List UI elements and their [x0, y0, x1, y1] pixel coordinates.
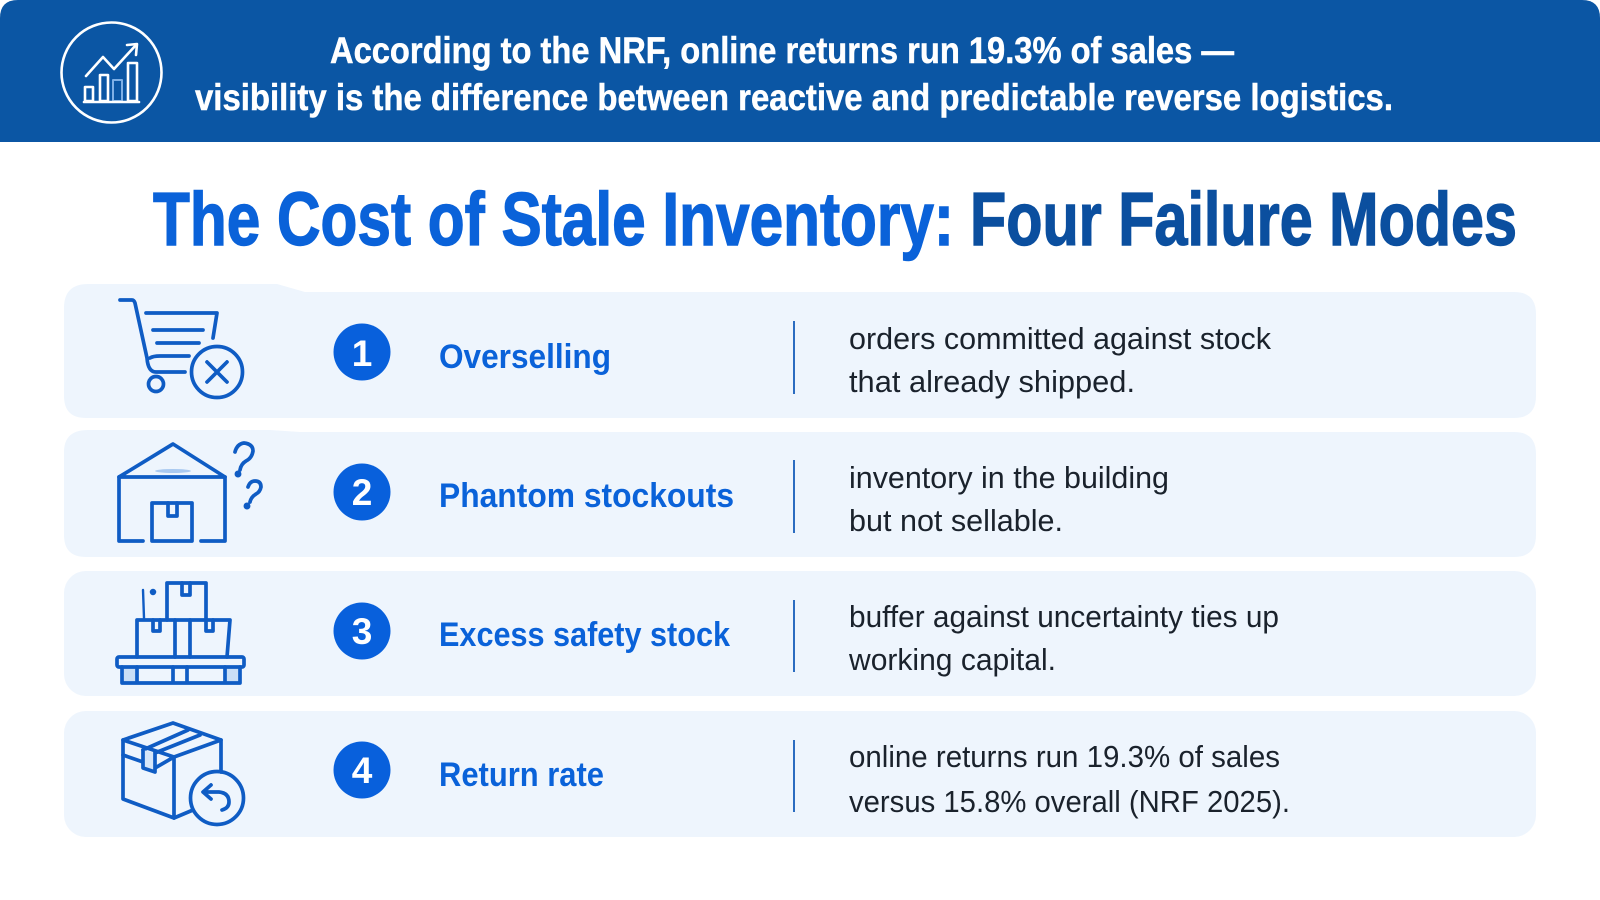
description: phantom stockouts: inventory in the building: [849, 460, 1169, 495]
banner: [0, 0, 1600, 142]
description: phantom stockouts: [849, 460, 1169, 538]
step number 4: [334, 742, 390, 798]
description: phantom stockouts: but not sellable.: [849, 503, 1063, 538]
step number 4: 4: [352, 750, 373, 791]
title: The Cost of Stale Inventory:: [153, 177, 954, 261]
icon: warehouse with question marks: [119, 443, 261, 541]
step number 1: [334, 324, 390, 380]
label: phantom stockouts: Phantom stockouts: [439, 477, 734, 515]
description: excess safety stock: [848, 599, 1279, 677]
label: overselling: Overselling: [439, 338, 611, 376]
description: return rate: online returns run 19.3% of sales: [849, 739, 1280, 774]
description: excess safety stock: working capital.: [848, 642, 1056, 677]
icon: shopping cart with x: [120, 300, 242, 398]
step number 2: [334, 464, 390, 520]
step number 3: [334, 602, 390, 660]
label: return rate: Return rate: [439, 756, 604, 794]
icon: boxes on pallet: [117, 583, 244, 683]
step number 2: 2: [352, 472, 372, 513]
description: overselling: orders committed against stock: [849, 321, 1271, 356]
panel: return rate: [64, 711, 1536, 837]
description: overselling: that already shipped.: [849, 364, 1135, 399]
banner text: [195, 30, 1393, 118]
icon: growth chart in circle: [62, 22, 162, 122]
description: overselling: [849, 321, 1271, 399]
label: excess safety stock: Excess safety stock: [439, 616, 730, 654]
step number 1: 1: [352, 333, 372, 374]
panel: phantom stockouts: [64, 430, 1536, 557]
description: return rate: [849, 739, 1290, 819]
description: excess safety stock: buffer against uncertainty ties up: [849, 599, 1279, 634]
banner text: visibility is the difference between reactive and predictable reverse logistics.: [195, 77, 1393, 118]
description: return rate: versus 15.8% overall (NRF 2025).: [849, 784, 1290, 819]
banner text: According to the NRF, online returns run 19.3% of sales —: [330, 30, 1234, 71]
step number 3: 3: [352, 611, 372, 652]
panel: overselling: [64, 284, 1536, 418]
icon: parcel with return arrow: [123, 723, 244, 824]
panel: excess safety stock: [64, 571, 1536, 696]
